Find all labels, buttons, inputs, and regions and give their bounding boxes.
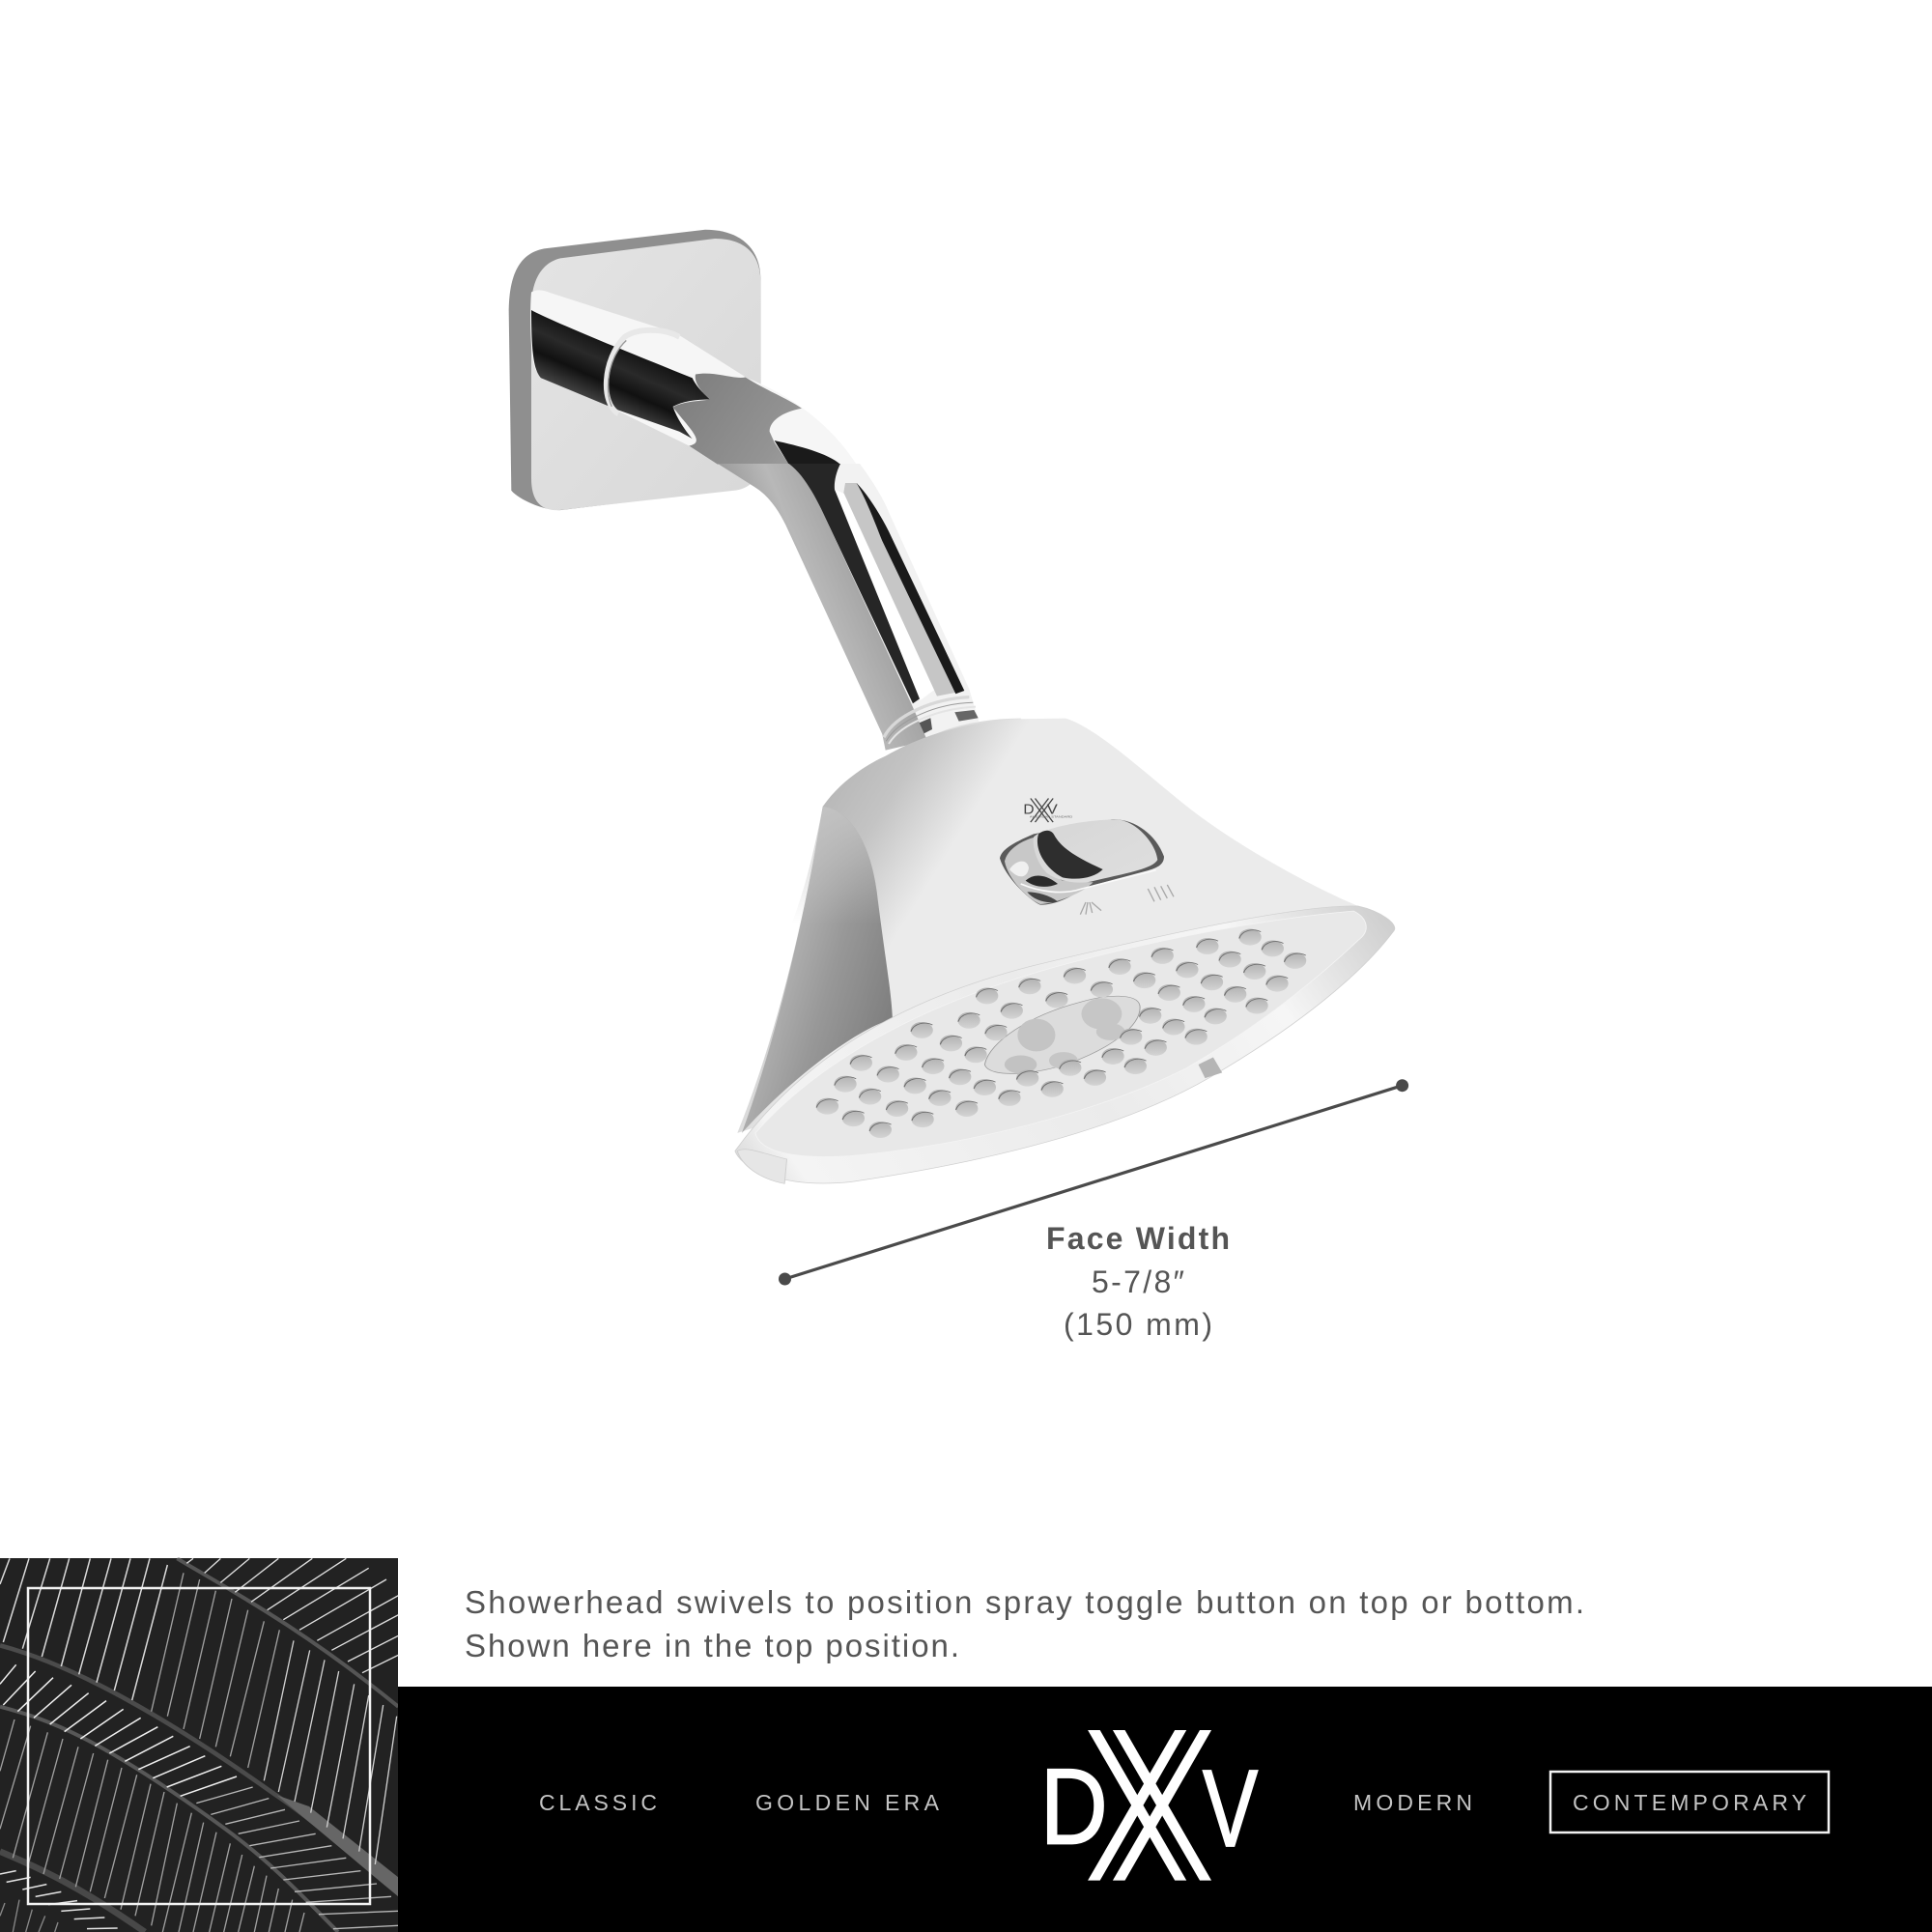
arm reflection tab xyxy=(1199,1058,1222,1078)
footer black bar xyxy=(398,1687,1932,1932)
product image: chrome showerhead on wall arm xyxy=(509,230,1395,1183)
wall plate xyxy=(509,230,760,510)
spray toggle button xyxy=(1000,819,1164,905)
nav: contemporary (selected): CONTEMPORARY xyxy=(1573,1790,1806,1815)
thumbnail: architectural photo with white frame xyxy=(0,1558,398,1932)
body band fade xyxy=(791,807,881,924)
white frame xyxy=(28,1588,370,1904)
wall plate and upper shower arm xyxy=(509,230,857,510)
nav: golden era: GOLDEN ERA xyxy=(755,1790,940,1815)
dimension line: face width xyxy=(779,1079,1408,1285)
dimension label: (150 mm) xyxy=(1064,1307,1212,1342)
spray nozzles xyxy=(816,929,1306,1138)
nav: contemporary (selected) xyxy=(1550,1772,1829,1833)
small DXV logo on head: AMERICAN STANDARD xyxy=(1030,815,1073,819)
description text: Showerhead swivels to position spray toggle button on top or bottom. xyxy=(465,1584,1584,1620)
body dark side band xyxy=(742,807,893,1133)
shower arm upper xyxy=(530,290,857,465)
head body xyxy=(737,719,1362,1133)
description text xyxy=(465,1584,1584,1663)
small DXV logo on head: V xyxy=(1047,801,1058,817)
centre spray disc xyxy=(984,996,1140,1073)
DXV logo xyxy=(1040,1730,1258,1881)
mode symbols xyxy=(1080,885,1174,915)
shower arm lower with stripes and collar xyxy=(718,464,979,751)
neck base xyxy=(926,719,1030,745)
roof lines pattern xyxy=(0,1558,398,1932)
dimension label: Face Width xyxy=(1046,1221,1230,1256)
face plate xyxy=(755,911,1366,1156)
nav: classic: CLASSIC xyxy=(539,1790,657,1815)
face rim xyxy=(735,906,1395,1183)
dimension label xyxy=(1046,1221,1230,1342)
description text: Shown here in the top position. xyxy=(465,1628,959,1663)
small DXV logo on head: D xyxy=(1023,801,1035,817)
nav: modern: MODERN xyxy=(1353,1790,1472,1815)
small DXV logo on head xyxy=(1023,798,1073,822)
DXV logo: D xyxy=(1040,1747,1108,1866)
dimension label: 5-7/8″ xyxy=(1092,1264,1184,1299)
text: V xyxy=(1203,1747,1258,1869)
showerhead xyxy=(735,719,1395,1183)
rim corner piece xyxy=(737,1150,786,1183)
